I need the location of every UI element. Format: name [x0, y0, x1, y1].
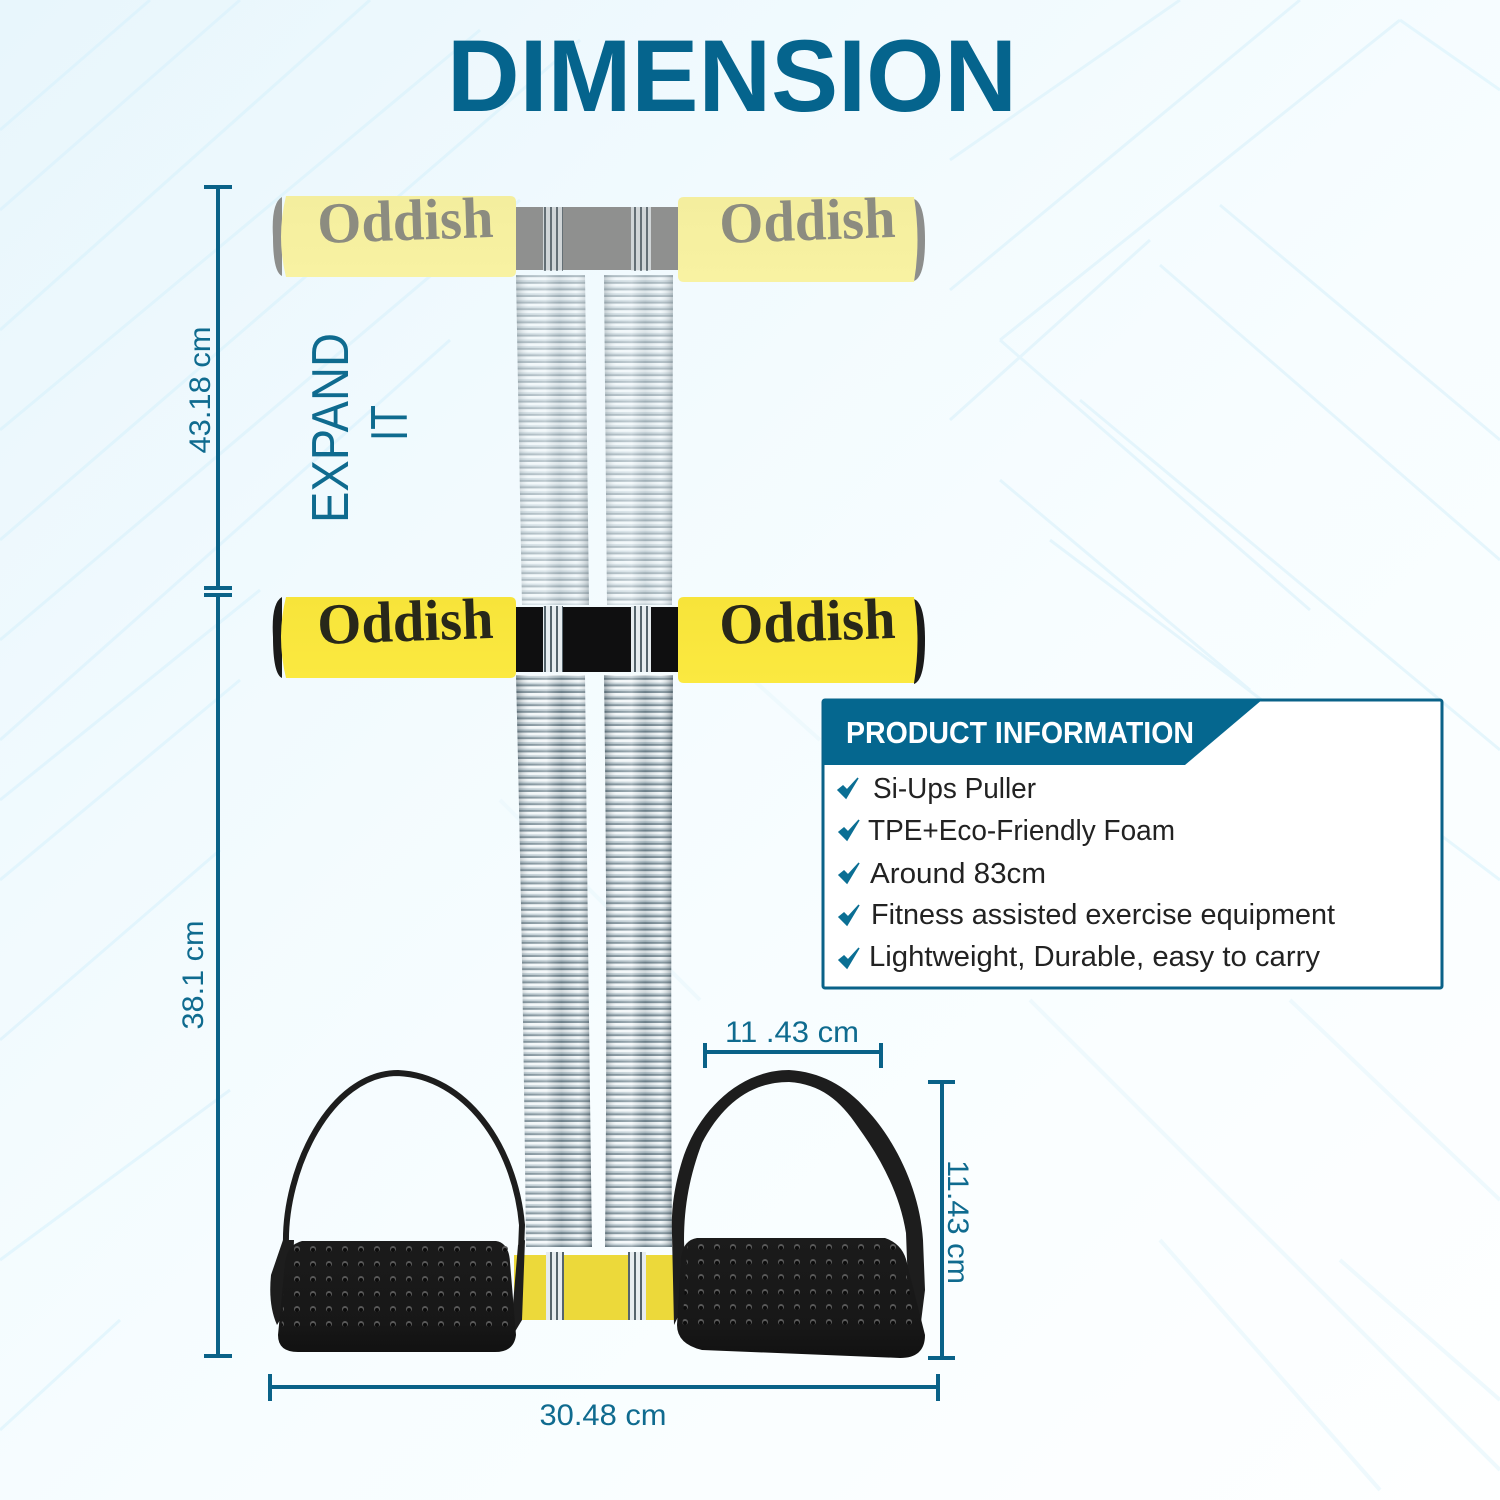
dimension: 43.18 cm height: 43.18 cm [184, 326, 217, 454]
expand it label [302, 333, 419, 523]
expanded handle (faded): Oddish [316, 185, 494, 256]
panel: product information [823, 699, 1442, 988]
right pedal with strap [672, 1070, 925, 1358]
expand it label: IT [361, 405, 419, 441]
left pedal with strap [270, 1073, 525, 1352]
dimension: 38.1 cm height: 38.1 cm [177, 920, 210, 1030]
item: si-ups puller: Si-Ups Puller [873, 773, 1036, 805]
dimension: 30.48 cm width: 30.48 cm [540, 1399, 666, 1432]
yellow base bar [514, 1252, 676, 1320]
dimension: 11.43 cm depth [928, 1082, 974, 1358]
expanded springs (faded) [516, 275, 673, 605]
dimension: 11.43 cm width [705, 1016, 881, 1068]
item: fitness use: Fitness assisted exercise equipment [871, 899, 1335, 931]
dimension: 43.18 cm height [184, 187, 232, 589]
item: material: TPE+Eco-Friendly Foam [868, 815, 1175, 847]
main handle: Oddish [718, 586, 896, 657]
main handle: Oddish [316, 586, 494, 657]
expanded handle (faded) [273, 185, 925, 282]
expanded handle (faded): Oddish [718, 185, 896, 256]
item: length: Around 83cm [870, 858, 1046, 890]
panel header [823, 699, 1263, 765]
panel heading: PRODUCT INFORMATION [846, 715, 1194, 750]
dimension: 38.1 cm height [177, 595, 232, 1356]
expand it label: EXPAND [302, 333, 360, 523]
dimension: 30.48 cm width [270, 1374, 938, 1432]
main handle [273, 586, 925, 684]
title: DIMENSION [447, 19, 1017, 133]
item: lightweight: Lightweight, Durable, easy to carry [869, 941, 1321, 973]
dimension: 11.43 cm depth: 11.43 cm [941, 1160, 974, 1284]
dimension: 11.43 cm width: 11 .43 cm [725, 1016, 859, 1049]
main springs [516, 675, 673, 1247]
